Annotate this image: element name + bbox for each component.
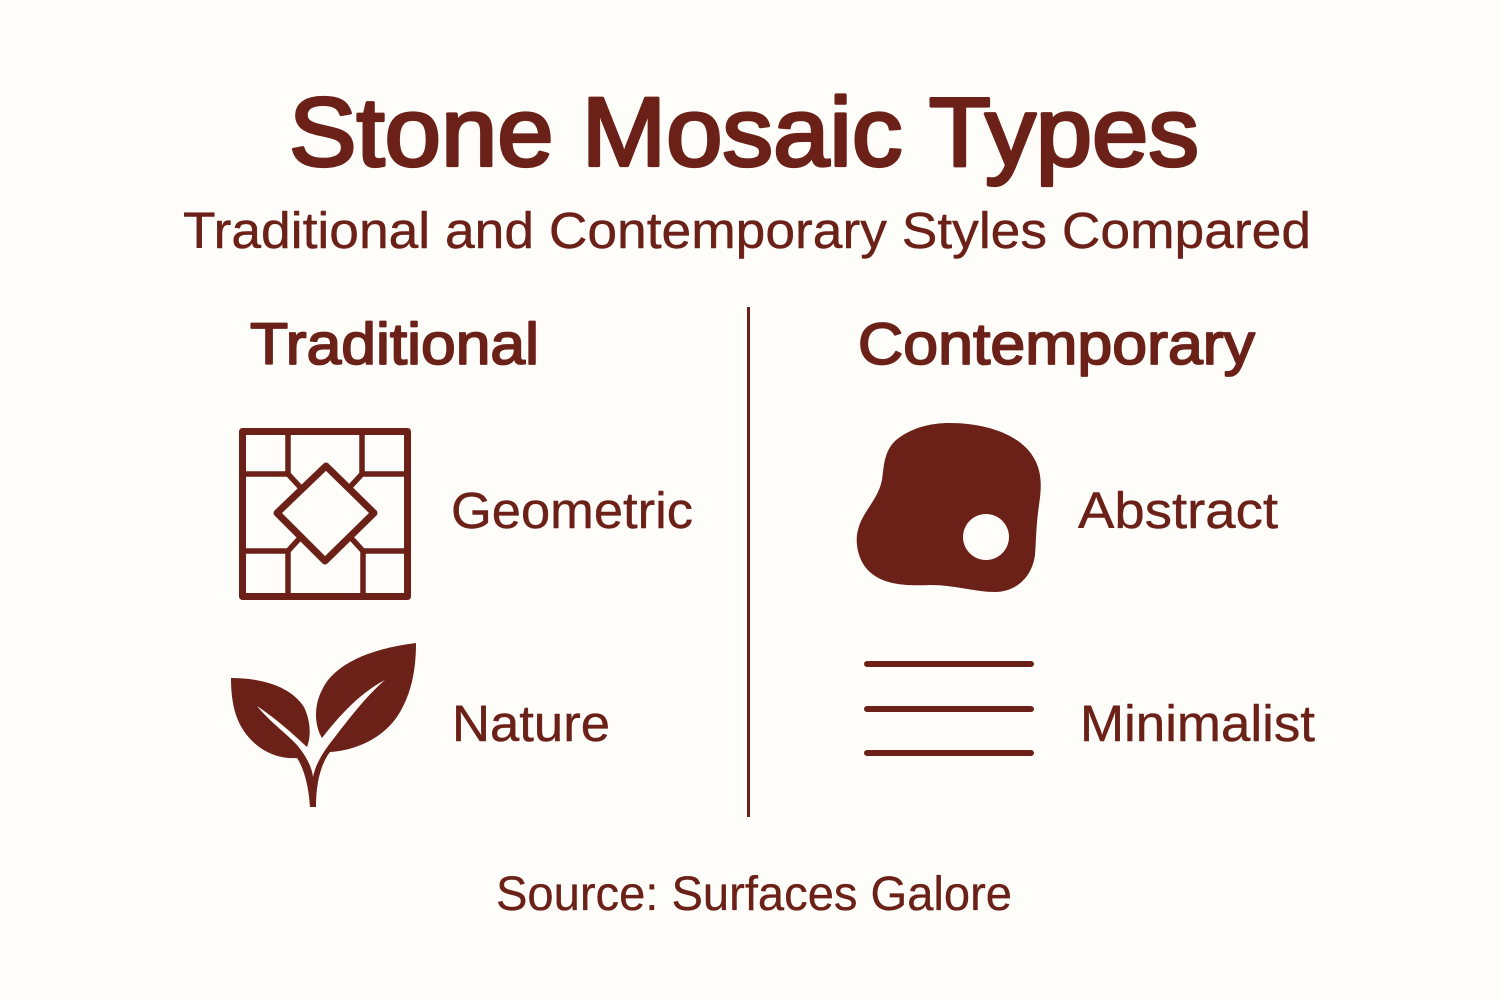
subtitle: Traditional and Contemporary Styles Compared: [183, 202, 1311, 259]
panel: traditional: [231, 312, 693, 807]
title: Stone Mosaic Types: [289, 78, 1199, 186]
icon: abstract blob: [857, 423, 1041, 592]
label: geometric: Geometric: [451, 482, 693, 539]
icon: nature leaves: [231, 643, 416, 807]
icon: geometric tile: [242, 432, 408, 596]
label: nature: Nature: [452, 695, 610, 752]
panel: contemporary: [857, 312, 1315, 753]
divider: [747, 307, 750, 817]
icon: minimalist lines: [867, 664, 1031, 753]
heading: contemporary: Contemporary: [858, 312, 1255, 377]
source: Source: Surfaces Galore: [496, 868, 1012, 921]
label: minimalist: Minimalist: [1080, 695, 1315, 752]
label: abstract: Abstract: [1078, 482, 1278, 539]
heading: traditional: Traditional: [250, 312, 539, 377]
